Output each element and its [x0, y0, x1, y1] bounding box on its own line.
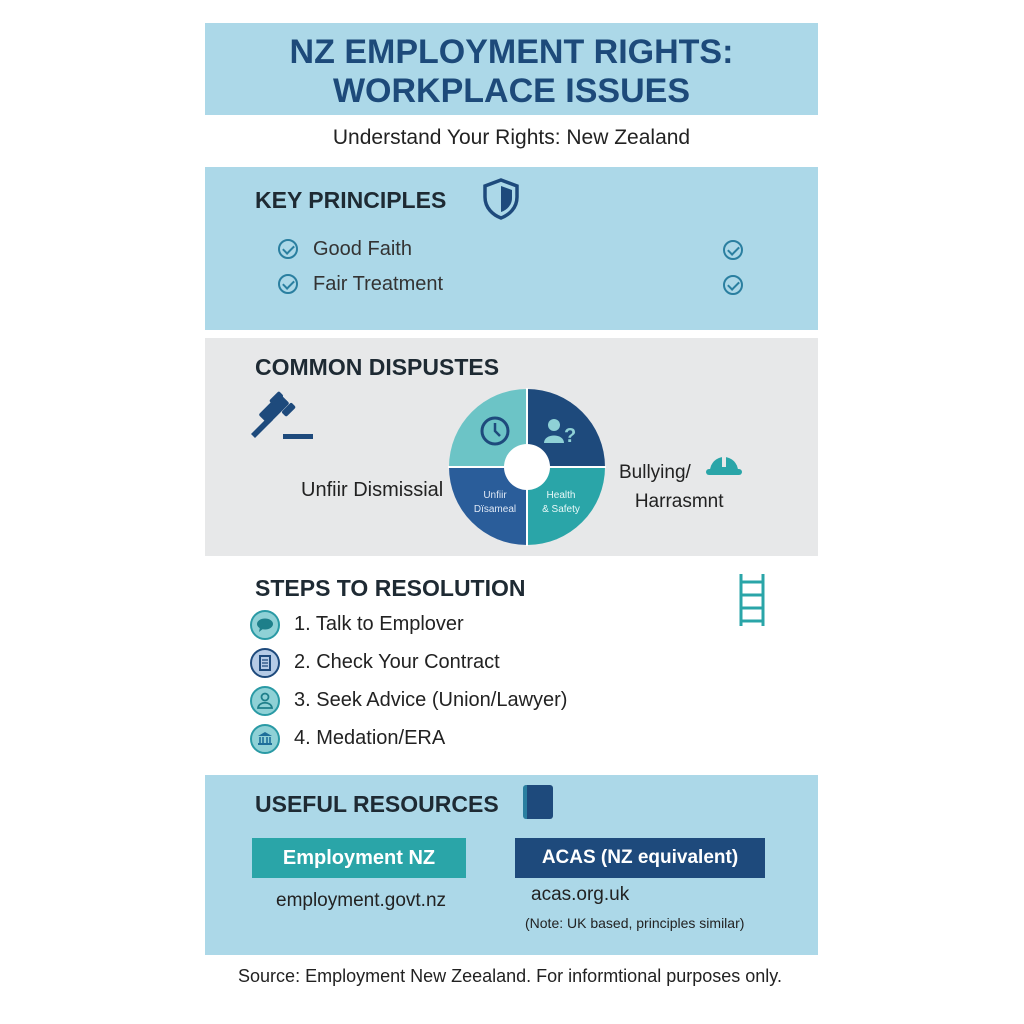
step 1	[250, 610, 464, 640]
label: bullying: Harrasmnt	[635, 491, 724, 512]
step 1: 1. Talk to Emplover	[294, 613, 464, 635]
chart: donut: & Safety	[542, 504, 580, 515]
title band	[205, 23, 818, 115]
step 3: 3. Seek Advice (Union/Lawyer)	[294, 689, 567, 711]
resource: acas: (Note: UK based, principles similar)	[525, 915, 744, 931]
resource: acas: ACAS (NZ equivalent)	[542, 847, 738, 868]
resource: employment nz: employment.govt.nz	[276, 890, 446, 911]
item: good faith: Good Faith	[313, 238, 412, 260]
resource: acas	[515, 838, 765, 931]
icon: shield	[483, 178, 519, 220]
resource: acas: acas.org.uk	[531, 884, 629, 905]
step 4: 4. Medation/ERA	[294, 727, 445, 749]
icon: gavel	[251, 392, 313, 439]
label: bullying: Bullying/	[619, 462, 691, 483]
icon: hard hat	[706, 457, 742, 475]
step 4	[250, 724, 446, 754]
chart: donut	[448, 388, 606, 546]
heading: resources: USEFUL RESOURCES	[255, 791, 499, 817]
chart: donut: Dïsameal	[474, 504, 516, 515]
subtitle: Understand Your Rights: New Zealand	[333, 126, 690, 149]
panel: useful resources	[205, 775, 818, 955]
title band: NZ EMPLOYMENT RIGHTS:	[290, 33, 733, 71]
heading: key principles: KEY PRINCIPLES	[255, 187, 446, 213]
step 2	[250, 648, 500, 678]
footer: Source: Employment New Zeealand. For informtional purposes only.	[238, 966, 782, 986]
title band: WORKPLACE ISSUES	[333, 72, 690, 110]
chart: donut: Unfiir	[483, 490, 507, 501]
resource: employment nz: Employment NZ	[283, 847, 435, 869]
chart: donut: ?	[564, 425, 576, 447]
heading: steps: STEPS TO RESOLUTION	[255, 575, 526, 601]
step 2: 2. Check Your Contract	[294, 651, 500, 673]
heading: common disputes: COMMON DISPUSTES	[255, 354, 499, 380]
icon: ladder	[740, 574, 764, 626]
step 3	[250, 686, 567, 716]
icon: book	[523, 785, 553, 819]
label: bullying	[619, 462, 724, 512]
item: fair treatment: Fair Treatment	[313, 273, 443, 295]
panel: key principles	[205, 167, 818, 330]
label: unfair dismissal: Unfiir Dismissial	[301, 479, 443, 501]
resource: employment nz	[252, 838, 466, 911]
icon: checks right	[723, 240, 743, 295]
panel: common disputes	[205, 338, 818, 556]
chart: donut: Health	[547, 490, 575, 501]
